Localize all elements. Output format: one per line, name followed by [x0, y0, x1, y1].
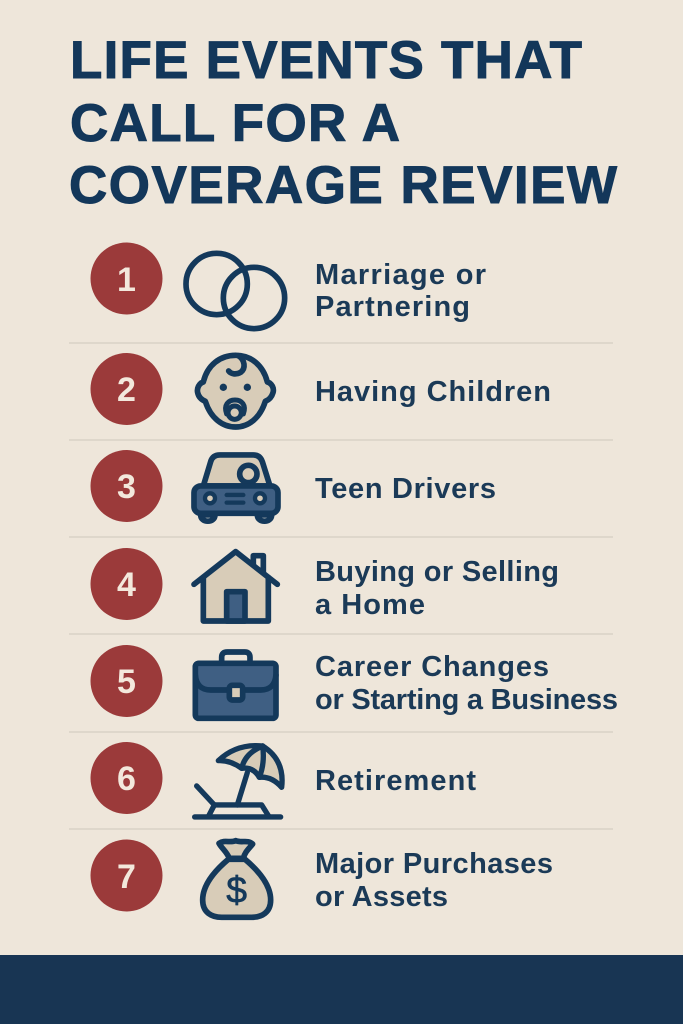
row 1: marriage or partnering: [90, 242, 486, 329]
footer band: [0, 955, 683, 1024]
icon: briefcase: [195, 652, 276, 718]
number badge 4: 4: [117, 566, 136, 604]
icon: money bag: [203, 841, 271, 917]
label: retirement: Retirement: [315, 765, 476, 797]
row 4: buying or selling a home: [90, 548, 559, 621]
icon: money bag: $: [226, 869, 247, 911]
row 6: retirement: [90, 742, 476, 817]
title: LIFE EVENTS THAT: [70, 31, 582, 90]
number badge 2: 2: [117, 371, 136, 409]
number badge 5: 5: [117, 663, 136, 701]
number badge 5: [90, 645, 162, 717]
title: [69, 31, 617, 215]
row 3: teen drivers: [90, 450, 496, 522]
label: major purchases or assets: [315, 848, 553, 913]
label: buying or selling a home: a Home: [315, 589, 425, 621]
number badge 4: [90, 548, 162, 620]
number badge 6: 6: [117, 760, 136, 798]
label: buying or selling a home: [315, 556, 559, 621]
row 7: major purchases or assets: [90, 840, 553, 917]
icon: interlocking rings: [186, 253, 285, 329]
label: career changes or starting a business: [315, 651, 618, 716]
icon: baby face: [197, 355, 273, 427]
label: marriage or partnering: Marriage or: [315, 259, 486, 291]
icon: house: [194, 552, 277, 621]
row 5: career changes: [90, 645, 618, 718]
label: major purchases or assets: or Assets: [315, 881, 448, 913]
number badge 3: [90, 450, 162, 522]
number badge 1: 1: [117, 261, 136, 299]
label: marriage or partnering: Partnering: [315, 291, 470, 323]
number badge 7: [90, 840, 162, 912]
title: COVERAGE REVIEW: [69, 156, 617, 215]
label: career changes or starting a business: or Starting a Business: [315, 684, 618, 716]
label: marriage or partnering: [315, 259, 486, 323]
number badge 1: [90, 242, 162, 314]
label: having children: Having Children: [315, 376, 551, 408]
label: career changes or starting a business: Career Changes: [315, 651, 549, 683]
label: teen drivers: Teen Drivers: [315, 473, 496, 505]
number badge 2: [90, 353, 162, 425]
icon: car: [194, 455, 278, 521]
number badge 3: 3: [117, 468, 136, 506]
icon: beach umbrella and lounger: [195, 746, 282, 817]
row 2: having children: [90, 353, 551, 427]
label: buying or selling a home: Buying or Selling: [315, 556, 559, 588]
number badge 7: 7: [117, 858, 136, 896]
number badge 6: [90, 742, 162, 814]
title: CALL FOR A: [70, 94, 400, 153]
label: major purchases or assets: Major Purchases: [315, 848, 553, 880]
